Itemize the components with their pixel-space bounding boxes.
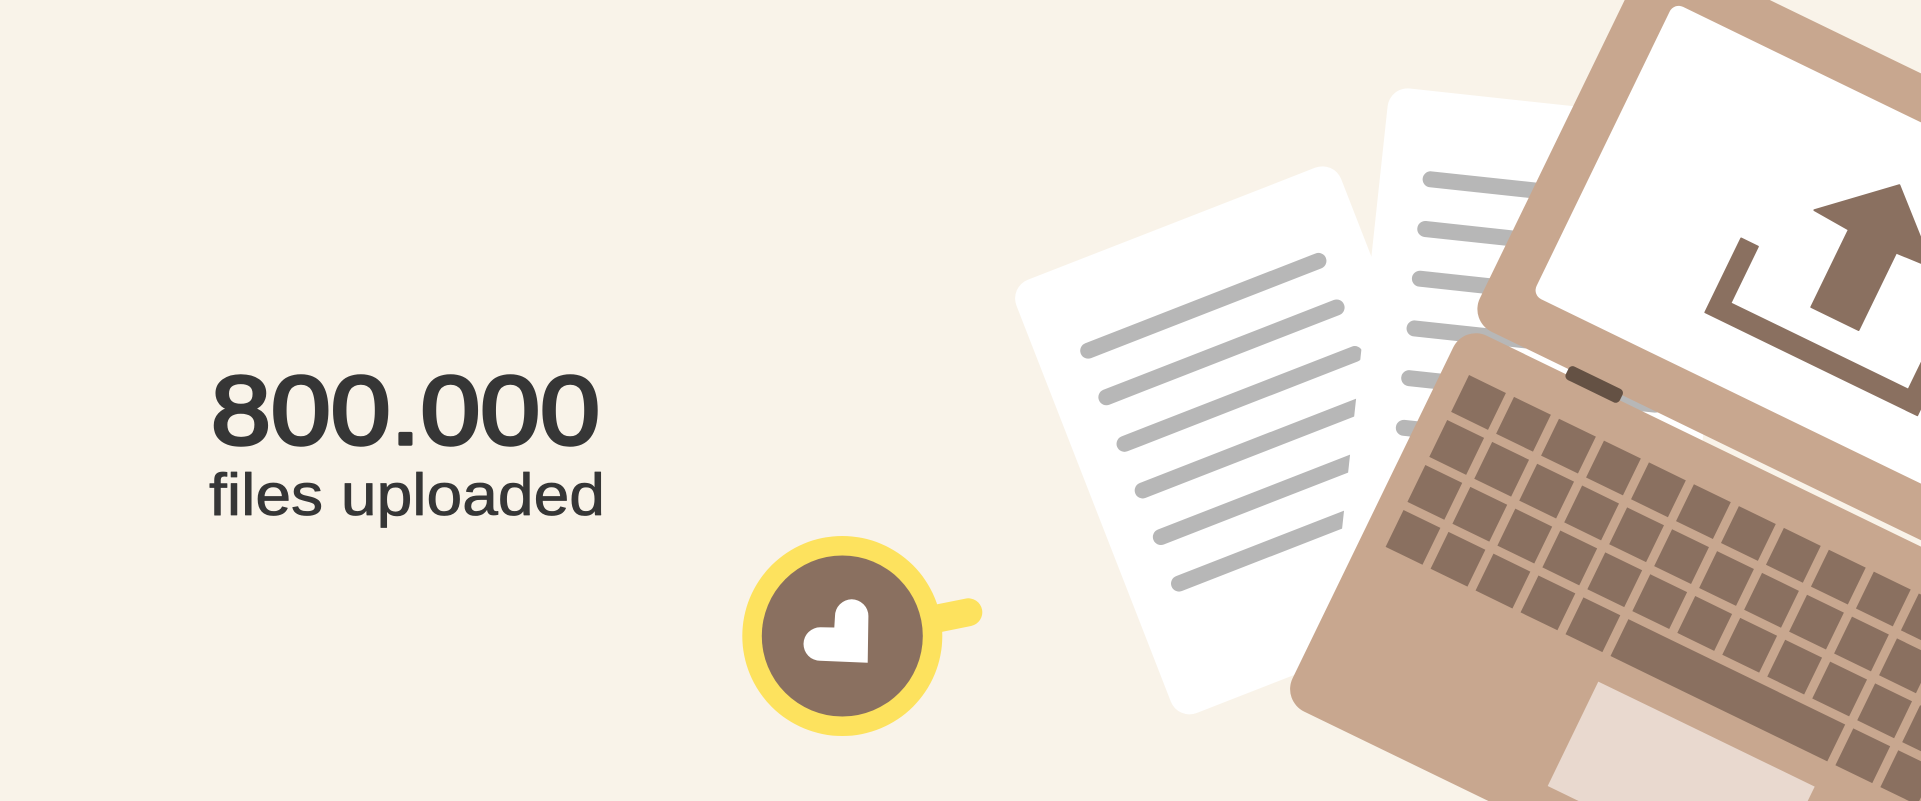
cup rim: [742, 536, 942, 736]
text lines: [1088, 261, 1409, 584]
key row 3: [1416, 483, 1921, 763]
keyboard: [1386, 393, 1921, 801]
laptop display: [1536, 6, 1921, 484]
key row 4 right: [1844, 747, 1921, 787]
icon: upload symbol: [1705, 133, 1921, 415]
touchpad: [1548, 682, 1815, 801]
coffee: [762, 556, 923, 716]
hinge: [1564, 365, 1624, 404]
statistic block: [209, 356, 605, 528]
key row 4 left: [1395, 528, 1611, 634]
laptop base: [1290, 333, 1921, 801]
laptop screen frame: [1477, 0, 1921, 540]
laptop: [1290, 0, 1921, 801]
icon: coffee cup with heart: [742, 536, 968, 736]
document: right page: [1340, 86, 1737, 586]
big number: 800.000: [211, 356, 600, 465]
space bar: [1610, 619, 1845, 761]
upload tray: [1705, 239, 1921, 415]
key row 1: [1460, 393, 1921, 673]
page sheet: [1340, 86, 1737, 586]
latte heart: [804, 599, 868, 663]
key row 2: [1438, 438, 1921, 718]
text lines: [1404, 179, 1677, 454]
cup handle: [920, 612, 968, 622]
document: left page: [1009, 160, 1503, 720]
caption: files uploaded: [209, 462, 605, 528]
page sheet: [1009, 160, 1503, 720]
upload arrow: [1776, 157, 1921, 347]
